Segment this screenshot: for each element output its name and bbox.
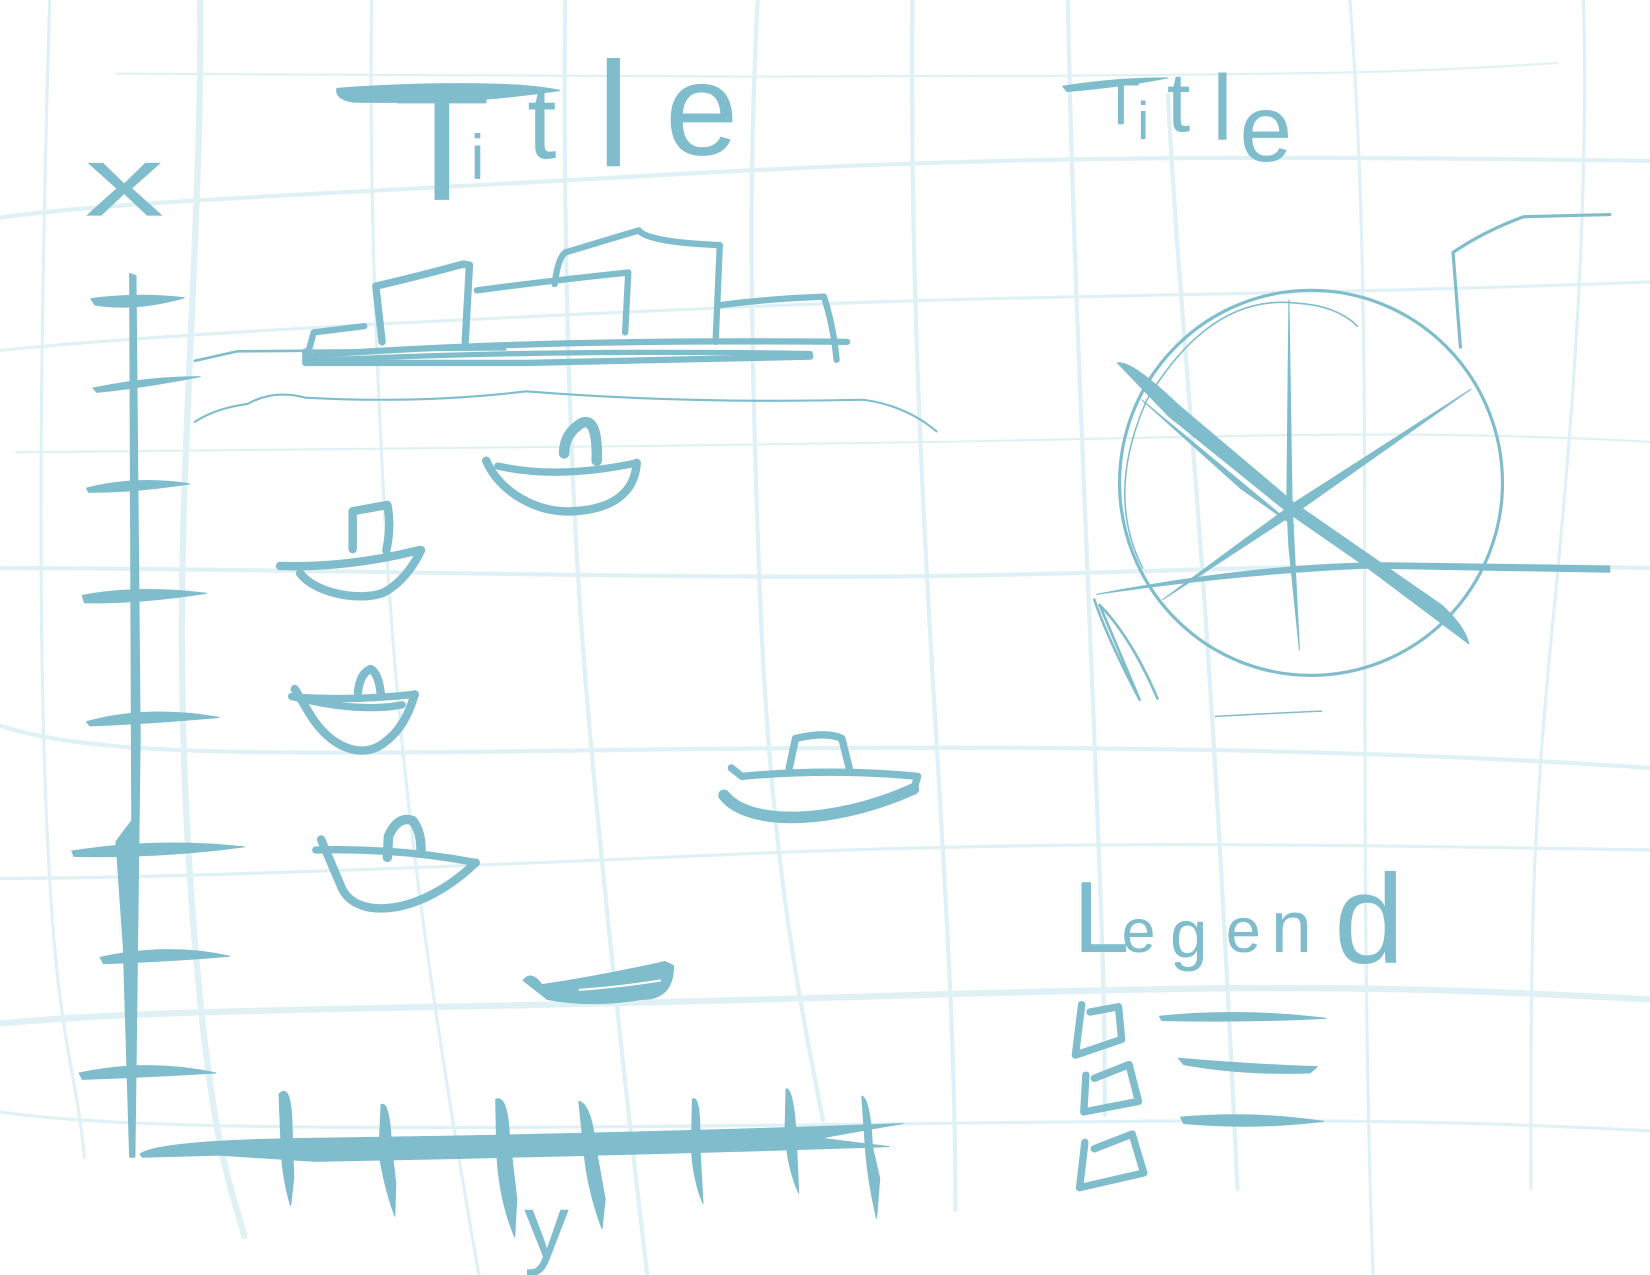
marker: upper left [280, 505, 421, 596]
marker: lower left [316, 819, 476, 908]
legend item 1 [1075, 1005, 1326, 1055]
chart: scatter markers [280, 422, 918, 1004]
title: pie chart: T [1102, 68, 1140, 138]
legend heading: d [1334, 849, 1404, 990]
title: main chart: t [527, 64, 557, 181]
legend heading: e [1226, 896, 1261, 966]
marker: right [724, 735, 918, 817]
marker: bottom flat [523, 962, 674, 1004]
title: pie chart [1063, 55, 1292, 182]
pie chart sketch [1094, 215, 1610, 716]
legend [1075, 1005, 1326, 1188]
title: pie chart: t [1167, 55, 1190, 149]
title: main chart: e [665, 36, 738, 183]
title: main chart: T [394, 58, 490, 234]
axis label: x: x [84, 127, 164, 238]
axis label: y: y [524, 1176, 569, 1275]
legend heading: e [1122, 897, 1156, 965]
marker: middle left [292, 669, 415, 751]
horizontal axis with ticks [140, 1089, 903, 1237]
legend heading: L [1073, 862, 1129, 974]
legend heading: g [1170, 897, 1207, 972]
title: main chart [337, 31, 738, 234]
title: main chart: l [597, 31, 630, 198]
legend heading: n [1271, 885, 1312, 968]
title: pie chart: e [1239, 76, 1292, 182]
legend item 2 [1084, 1058, 1317, 1112]
bracket under top bars [195, 391, 937, 431]
vertical axis with ticks [72, 274, 244, 1157]
legend item 3 [1080, 1115, 1324, 1188]
chart: top stepped bars [195, 230, 847, 363]
title: pie chart: l [1212, 56, 1233, 160]
title: main chart: i [470, 123, 485, 193]
marker: top centre [486, 422, 637, 511]
title: pie chart: i [1137, 92, 1149, 151]
